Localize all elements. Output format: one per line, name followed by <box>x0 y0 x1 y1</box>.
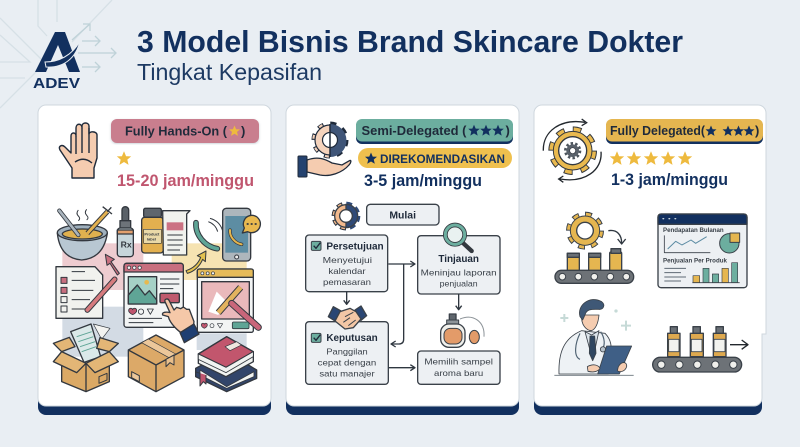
icon: dropper bottle: Rx <box>121 240 132 250</box>
icon: bowl <box>57 207 112 260</box>
icon: doctor with tablet <box>554 300 634 375</box>
label pill: Fully Delegated: Fully Delegated( <box>610 123 706 138</box>
hours: 3-5 jam/minggu <box>364 172 482 190</box>
icon: magnifier <box>445 225 472 251</box>
step: Keputusan: Keputusan <box>326 333 378 344</box>
icon: closed box <box>128 335 184 392</box>
icon: handshake <box>328 306 367 329</box>
icon: product jar: Product <box>144 231 160 236</box>
icon: checklist <box>56 267 103 318</box>
icon: smartphone <box>223 208 260 261</box>
step: Persetujuan <box>306 235 388 292</box>
arrows <box>105 251 206 275</box>
label pill: Semi-Delegated <box>356 119 513 144</box>
badge: recommended: DIREKOMENDASIKAN <box>380 152 505 166</box>
icon: gear on hand <box>298 124 351 177</box>
logo: ADEV <box>33 24 116 92</box>
icon: green handset <box>196 218 223 249</box>
flowchart <box>306 204 500 384</box>
step: Tinjauan: Tinjauan <box>438 254 479 265</box>
icon: conveyor with jars <box>555 249 634 283</box>
icon: product jar: label <box>147 236 156 241</box>
hours: 15-20 jam/minggu <box>117 172 254 190</box>
icon: pointing hand <box>162 299 199 343</box>
panel: Fully Hands-On <box>38 105 271 415</box>
icon: editing window <box>197 269 258 332</box>
step: Tinjauan <box>418 236 500 294</box>
label pill: Fully Hands-On: ) <box>241 124 245 138</box>
icon: perfume <box>441 314 484 347</box>
icon: product jar <box>142 208 163 253</box>
start box <box>367 204 439 225</box>
flow arrows <box>344 261 462 371</box>
step: Tinjauan: penjualan <box>440 279 478 289</box>
star rating <box>610 151 692 165</box>
step: Keputusan <box>306 322 388 384</box>
icon: social post window <box>124 263 183 327</box>
star rating <box>117 151 131 165</box>
step: Persetujuan: Menyetujui <box>323 255 372 265</box>
icon: start gear <box>335 204 358 228</box>
label pill: Semi-Delegated: Semi-Delegated ( <box>362 123 467 138</box>
icon: open box <box>53 324 118 392</box>
step: Memilih sampel: Memilih sampel <box>424 357 493 367</box>
step: Keputusan: Panggilan <box>326 346 368 356</box>
icon: pencil <box>87 279 115 310</box>
label pill: Semi-Delegated: ) <box>506 123 510 138</box>
label pill: Fully Hands-On: Fully Hands-On ( <box>125 124 228 138</box>
panel: Semi-Delegated <box>286 105 519 415</box>
illustration group: automation <box>554 214 748 375</box>
label pill: Fully Delegated <box>606 119 763 144</box>
logo: ADEV: ADEV <box>33 76 80 92</box>
step: Keputusan: satu manajer <box>319 368 375 378</box>
step: Persetujuan: pemasaran <box>323 277 371 287</box>
step: Persetujuan: kalendar <box>328 266 366 276</box>
icon: gear and arrow <box>570 215 626 246</box>
label pill: Fully Hands-On <box>111 119 259 143</box>
badge: recommended <box>358 148 512 168</box>
subtitle: Tingkat Kepasifan <box>137 59 322 85</box>
step: Tinjauan: Meninjau laporan <box>421 267 497 277</box>
title: 3 Model Bisnis Brand Skincare Dokter <box>137 24 683 59</box>
icon: gear with cycle arrows <box>543 119 601 182</box>
dashboard: Pendapatan Bulanan <box>663 227 724 234</box>
step: Memilih sampel <box>418 351 500 384</box>
icon: open hand <box>59 123 97 178</box>
step: Keputusan: cepat dengan <box>318 357 377 367</box>
icon: conveyor with bottles <box>653 327 748 372</box>
hours: 1-3 jam/minggu <box>611 171 728 189</box>
dashboard <box>658 214 747 288</box>
label pill: Fully Delegated: ) <box>755 123 759 138</box>
icon: dropper bottle <box>117 207 133 257</box>
step: Persetujuan: Persetujuan <box>326 242 384 253</box>
icon: arrows behind logo <box>72 24 116 72</box>
icon: product sheet <box>163 211 190 255</box>
icon: books <box>195 337 257 392</box>
start box: Mulai <box>389 210 416 221</box>
illustration group: hands-on tasks <box>53 207 260 392</box>
step: Memilih sampel: aroma baru <box>434 368 484 378</box>
panel: Fully Delegated <box>534 105 766 415</box>
dashboard: Penjualan Per Produk <box>663 257 727 264</box>
